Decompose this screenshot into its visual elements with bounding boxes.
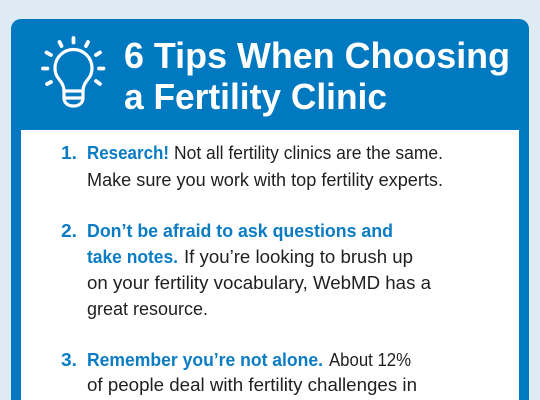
tip 1: Research! <box>87 143 169 163</box>
tip 2 <box>61 221 432 319</box>
tip 3 <box>61 350 417 395</box>
tip 3: 3. <box>61 350 77 370</box>
title: 6 Tips When Choosing <box>124 35 510 76</box>
icon: light bulb <box>43 38 104 106</box>
tip 1: 1. <box>61 143 77 163</box>
tip 2: take notes. <box>87 247 178 267</box>
tip 3: About 12% <box>329 350 411 370</box>
tip 2: 2. <box>61 221 77 241</box>
title <box>124 35 510 117</box>
tip 1: Not all fertility clinics are the same. <box>174 143 443 163</box>
tip 2: on your fertility vocabulary, WebMD has a <box>87 273 432 293</box>
tip 3: Remember you’re not alone. <box>87 350 323 370</box>
tip 1 <box>61 143 443 190</box>
tip 3: of people deal with fertility challenges in <box>87 375 417 395</box>
tip 2: great resource. <box>87 299 208 319</box>
tip 2: If you’re looking to brush up <box>184 247 413 267</box>
tip 1: Make sure you work with top fertility experts. <box>87 170 443 190</box>
title: a Fertility Clinic <box>124 76 387 117</box>
tip 2: Don’t be afraid to ask questions and <box>87 221 393 241</box>
